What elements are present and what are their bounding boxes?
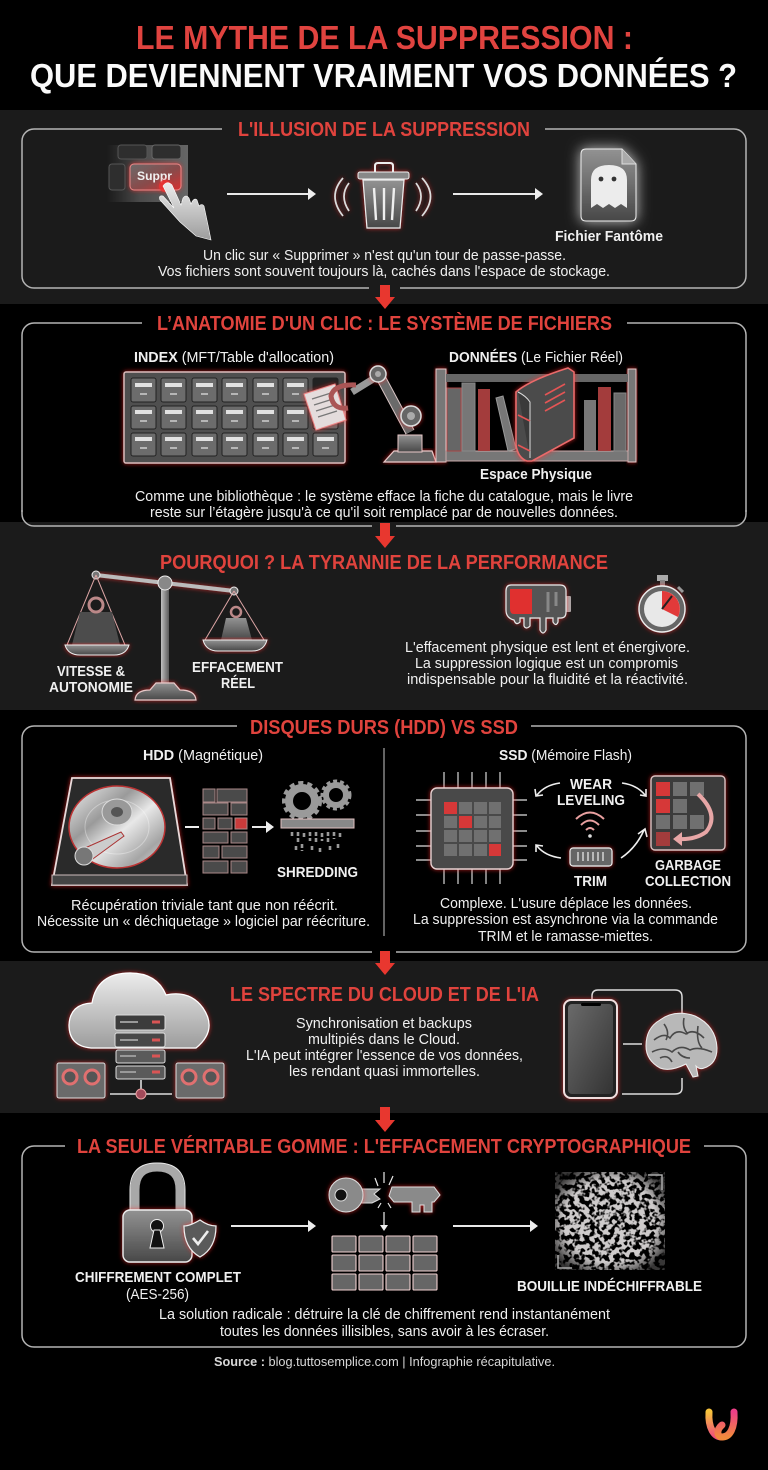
label: BOUILLIE INDÉCHIFFRABLE: [517, 1278, 702, 1295]
icon: keyboard key and hand: Suppr: [137, 169, 172, 183]
icon: phone: [564, 1000, 617, 1098]
label: garbage collection: COLLECTION: [645, 873, 731, 890]
heading: L'ILLUSION DE LA SUPPRESSION: [238, 119, 530, 141]
panel: pourquoi la tyrannie de la performance: [0, 510, 768, 710]
icon: scrambled data noise: [555, 1172, 665, 1270]
text block: ssd: [413, 896, 718, 945]
label: Fichier Fantôme: [555, 228, 663, 245]
label: chiffrement complet: [75, 1269, 241, 1303]
icon: index cabinet: [124, 372, 345, 463]
label: wear leveling: [557, 776, 625, 809]
label: garbage collection: [645, 857, 731, 890]
icon: robot arm with index card: [304, 366, 436, 462]
text block: [246, 1016, 523, 1080]
heading: L’ANATOMIE D'UN CLIC : LE SYSTÈME DE FICHIERS: [157, 312, 612, 335]
icon: wifi trim device: [570, 812, 612, 866]
label: garbage collection: GARBAGE: [655, 857, 721, 874]
text block: hdd: Nécessite un « déchiquetage » logiciel par réécriture.: [37, 914, 370, 930]
label: wear leveling: WEAR: [570, 776, 612, 793]
panel: spectre du cloud et de l'ia: [0, 961, 768, 1113]
arrow: [453, 188, 543, 200]
arrow: [453, 1220, 538, 1232]
icon: data blocks: [203, 789, 247, 873]
text block: ssd: Complexe. L'usure déplace les données.: [440, 896, 692, 912]
icon: melting battery: [506, 585, 571, 633]
arrow: [252, 821, 274, 833]
label: effacement reel: RÉEL: [221, 675, 255, 692]
icon: connectors: [592, 990, 682, 1094]
label: vitesse et autonomie: VITESSE &: [57, 663, 125, 680]
text block: Synchronisation et backups: [296, 1016, 472, 1032]
arrow: section 4 to 5: [375, 951, 395, 975]
icon: bookshelf and book: [436, 368, 636, 462]
title: LE MYTHE DE LA SUPPRESSION :: [136, 19, 633, 56]
text block: ssd: La suppression est asynchrone via la commande: [413, 912, 718, 928]
label: TRIM: [574, 873, 607, 890]
icon: garbage collection grid: [651, 776, 725, 850]
label: wear leveling: LEVELING: [557, 792, 625, 809]
text block: hdd: Récupération triviale tant que non réécrit.: [71, 898, 338, 914]
icon: keyboard key and hand: [107, 145, 211, 240]
label: vitesse et autonomie: [49, 663, 133, 696]
icon: data grid: [332, 1236, 437, 1290]
icon: hard disk: [52, 778, 187, 885]
label: vitesse et autonomie: AUTONOMIE: [49, 679, 133, 696]
icon: ghost file: [581, 149, 636, 221]
heading: LE SPECTRE DU CLOUD ET DE L'IA: [230, 984, 539, 1006]
arrows: cycle: [535, 783, 647, 858]
text block: reste sur l’étagère jusqu'à ce qu'il soit remplacé par de nouvelles données.: [150, 505, 618, 521]
text block: indispensable pour la fluidité et la réactivité.: [407, 672, 688, 688]
text block: Comme une bibliothèque : le système efface la fiche du catalogue, mais le livre: [135, 489, 633, 505]
panel: anatomie d'un clic: [0, 304, 768, 522]
text block: [159, 1307, 610, 1340]
label: effacement reel: [192, 659, 283, 692]
text block: ssd: TRIM et le ramasse-miettes.: [478, 929, 653, 945]
arrow: section 5 to 6: [375, 1107, 395, 1132]
text block: L'IA peut intégrer l'essence de vos données,: [246, 1048, 523, 1064]
arrow: section 1 to 2: [375, 285, 395, 309]
icon: padlock and shield: [123, 1163, 216, 1262]
text block: Vos fichiers sont souvent toujours là, cachés dans l'espace de stockage.: [158, 264, 610, 280]
text block: Un clic sur « Supprimer » n'est qu'un tour de passe-passe.: [203, 248, 566, 264]
source: Source : blog.tuttosemplice.com | Infographie récapitulative.: [214, 1354, 555, 1369]
text block: La suppression logique est un compromis: [415, 656, 678, 672]
label: Espace Physique: [480, 466, 592, 483]
panel: effacement cryptographique: [21, 1135, 747, 1440]
text block: hdd: [37, 898, 370, 930]
text block: multipiés dans le Cloud.: [308, 1032, 460, 1048]
text block: [135, 489, 633, 521]
heading: DISQUES DURS (HDD) VS SSD: [250, 717, 518, 739]
label: index: INDEX (MFT/Table d'allocation): [134, 350, 334, 366]
icon: stopwatch: [639, 575, 685, 632]
title: [30, 19, 737, 94]
icon: cloud with servers and tapes: [57, 973, 224, 1099]
text block: L'effacement physique est lent et énergivore.: [405, 640, 690, 656]
label: chiffrement complet: (AES-256): [126, 1286, 189, 1303]
label: SHREDDING: [277, 864, 358, 881]
label: chiffrement complet: CHIFFREMENT COMPLET: [75, 1269, 241, 1286]
label: donnees: DONNÉES (Le Fichier Réel): [449, 349, 623, 366]
title: QUE DEVIENNENT VRAIMENT VOS DONNÉES ?: [30, 57, 737, 94]
icon: broken key: [329, 1172, 440, 1231]
icon: brain: [646, 1013, 717, 1077]
text block: [158, 248, 610, 280]
label: ssd: SSD (Mémoire Flash): [499, 748, 632, 764]
arrow: [231, 1220, 316, 1232]
heading: POURQUOI ? LA TYRANNIE DE LA PERFORMANCE: [160, 552, 608, 574]
panel: disques durs vs ssd: [0, 710, 768, 961]
icon: flash chip: [416, 772, 527, 884]
icon: trash can: [335, 163, 430, 228]
panel: illusion de la suppression: [0, 110, 768, 304]
icon: shredder gears: [281, 781, 354, 853]
text block: [405, 640, 690, 688]
text block: La solution radicale : détruire la clé de chiffrement rend instantanément: [159, 1307, 610, 1323]
arrow: [227, 188, 316, 200]
label: hdd: HDD (Magnétique): [143, 748, 263, 764]
icon: balance scale: [65, 571, 267, 700]
heading: LA SEULE VÉRITABLE GOMME : L'EFFACEMENT CRYPTOGRAPHIQUE: [77, 1135, 691, 1158]
label: effacement reel: EFFACEMENT: [192, 659, 283, 676]
arrow: section 2 to 3: [375, 523, 395, 548]
icon: logo: [709, 1412, 734, 1437]
text block: les rendant quasi immortelles.: [289, 1064, 480, 1080]
text block: toutes les données illisibles, sans avoir à les écraser.: [220, 1324, 549, 1340]
